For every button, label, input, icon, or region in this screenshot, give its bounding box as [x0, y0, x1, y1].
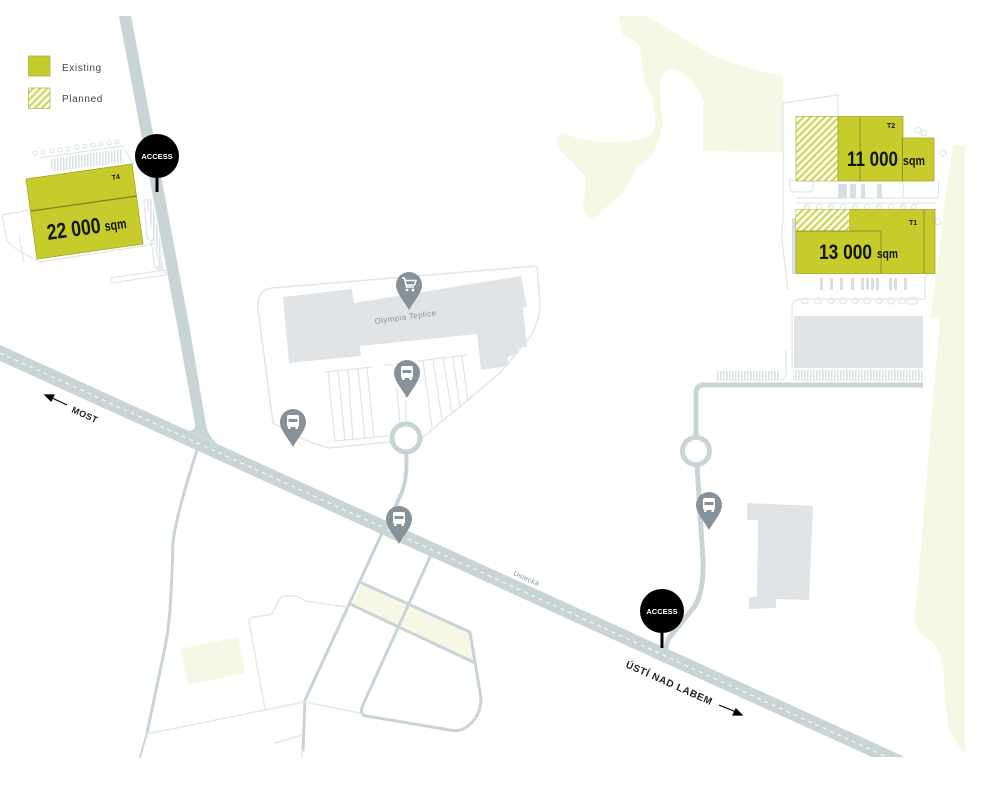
pin: bus east road	[696, 492, 722, 530]
legend label: existing: Existing	[62, 63, 102, 74]
access marker: north: ACCESS	[141, 152, 173, 161]
parking stalls: T1 and T2	[792, 184, 907, 290]
direction label: Most	[45, 395, 100, 425]
building: grey hall south of T1	[794, 316, 923, 368]
label: 13 000 sqm: sqm	[877, 246, 898, 261]
parking stalls: T4	[50, 149, 163, 258]
access marker: east: ACCESS	[646, 607, 678, 616]
direction label: Ústí nad Labem	[624, 658, 742, 715]
label: 13 000 sqm: 13 000	[819, 241, 872, 264]
green area: north	[557, 16, 783, 220]
north access road	[119, 16, 218, 444]
building T2	[796, 116, 934, 181]
label: 11 000 sqm: sqm	[903, 153, 925, 168]
roundabout and road: Olympia	[384, 424, 420, 532]
green area: east strip	[915, 145, 965, 755]
pin: bus on highway	[386, 506, 412, 544]
site plan: T4 surroundings	[2, 140, 166, 283]
green area: residential block	[181, 637, 245, 685]
legend swatch: planned	[28, 88, 50, 108]
building T4	[26, 164, 143, 259]
pin: bus at Olympia	[394, 360, 420, 398]
arrow: towards Ústí nad Labem	[719, 705, 742, 715]
access marker: north	[135, 134, 179, 192]
green area: strip between roads	[352, 583, 473, 662]
label: T4: T4	[111, 174, 120, 182]
label: T2: T2	[887, 123, 895, 130]
label: 22 000 sqm: 22 000	[45, 213, 102, 245]
pin: bus west of Olympia	[280, 409, 306, 447]
label: T1: T1	[909, 220, 917, 227]
text: Most: MOST	[70, 405, 100, 425]
highway road	[0, 345, 905, 757]
roundabout and road: east site	[666, 385, 923, 650]
parking stalls along east service road	[717, 370, 923, 381]
arrow: towards Most	[45, 395, 67, 405]
pin: shopping cart	[396, 272, 422, 310]
building: east warehouse	[747, 503, 813, 609]
legend label: planned: Planned	[62, 94, 103, 105]
text: Olympia Teplice: Olympia Teplice	[374, 308, 437, 326]
legend	[28, 56, 103, 108]
legend swatch: existing	[28, 56, 50, 76]
site outline: Olympia Teplice	[258, 266, 540, 448]
label: 22 000 sqm: sqm	[103, 215, 127, 234]
building T1	[796, 210, 935, 274]
label: 11 000 sqm: 11 000	[847, 148, 898, 171]
building: Olympia Teplice shopping centre	[283, 276, 527, 370]
parking lot	[325, 355, 468, 441]
local streets south of highway	[140, 450, 481, 757]
access marker: east	[640, 589, 684, 648]
site plan: T1 and T2 surroundings	[781, 95, 946, 381]
road name: Ústecká: Ústecká	[512, 569, 541, 588]
text: Ústí nad Labem: ÚSTÍ NAD LABEM	[624, 658, 715, 708]
